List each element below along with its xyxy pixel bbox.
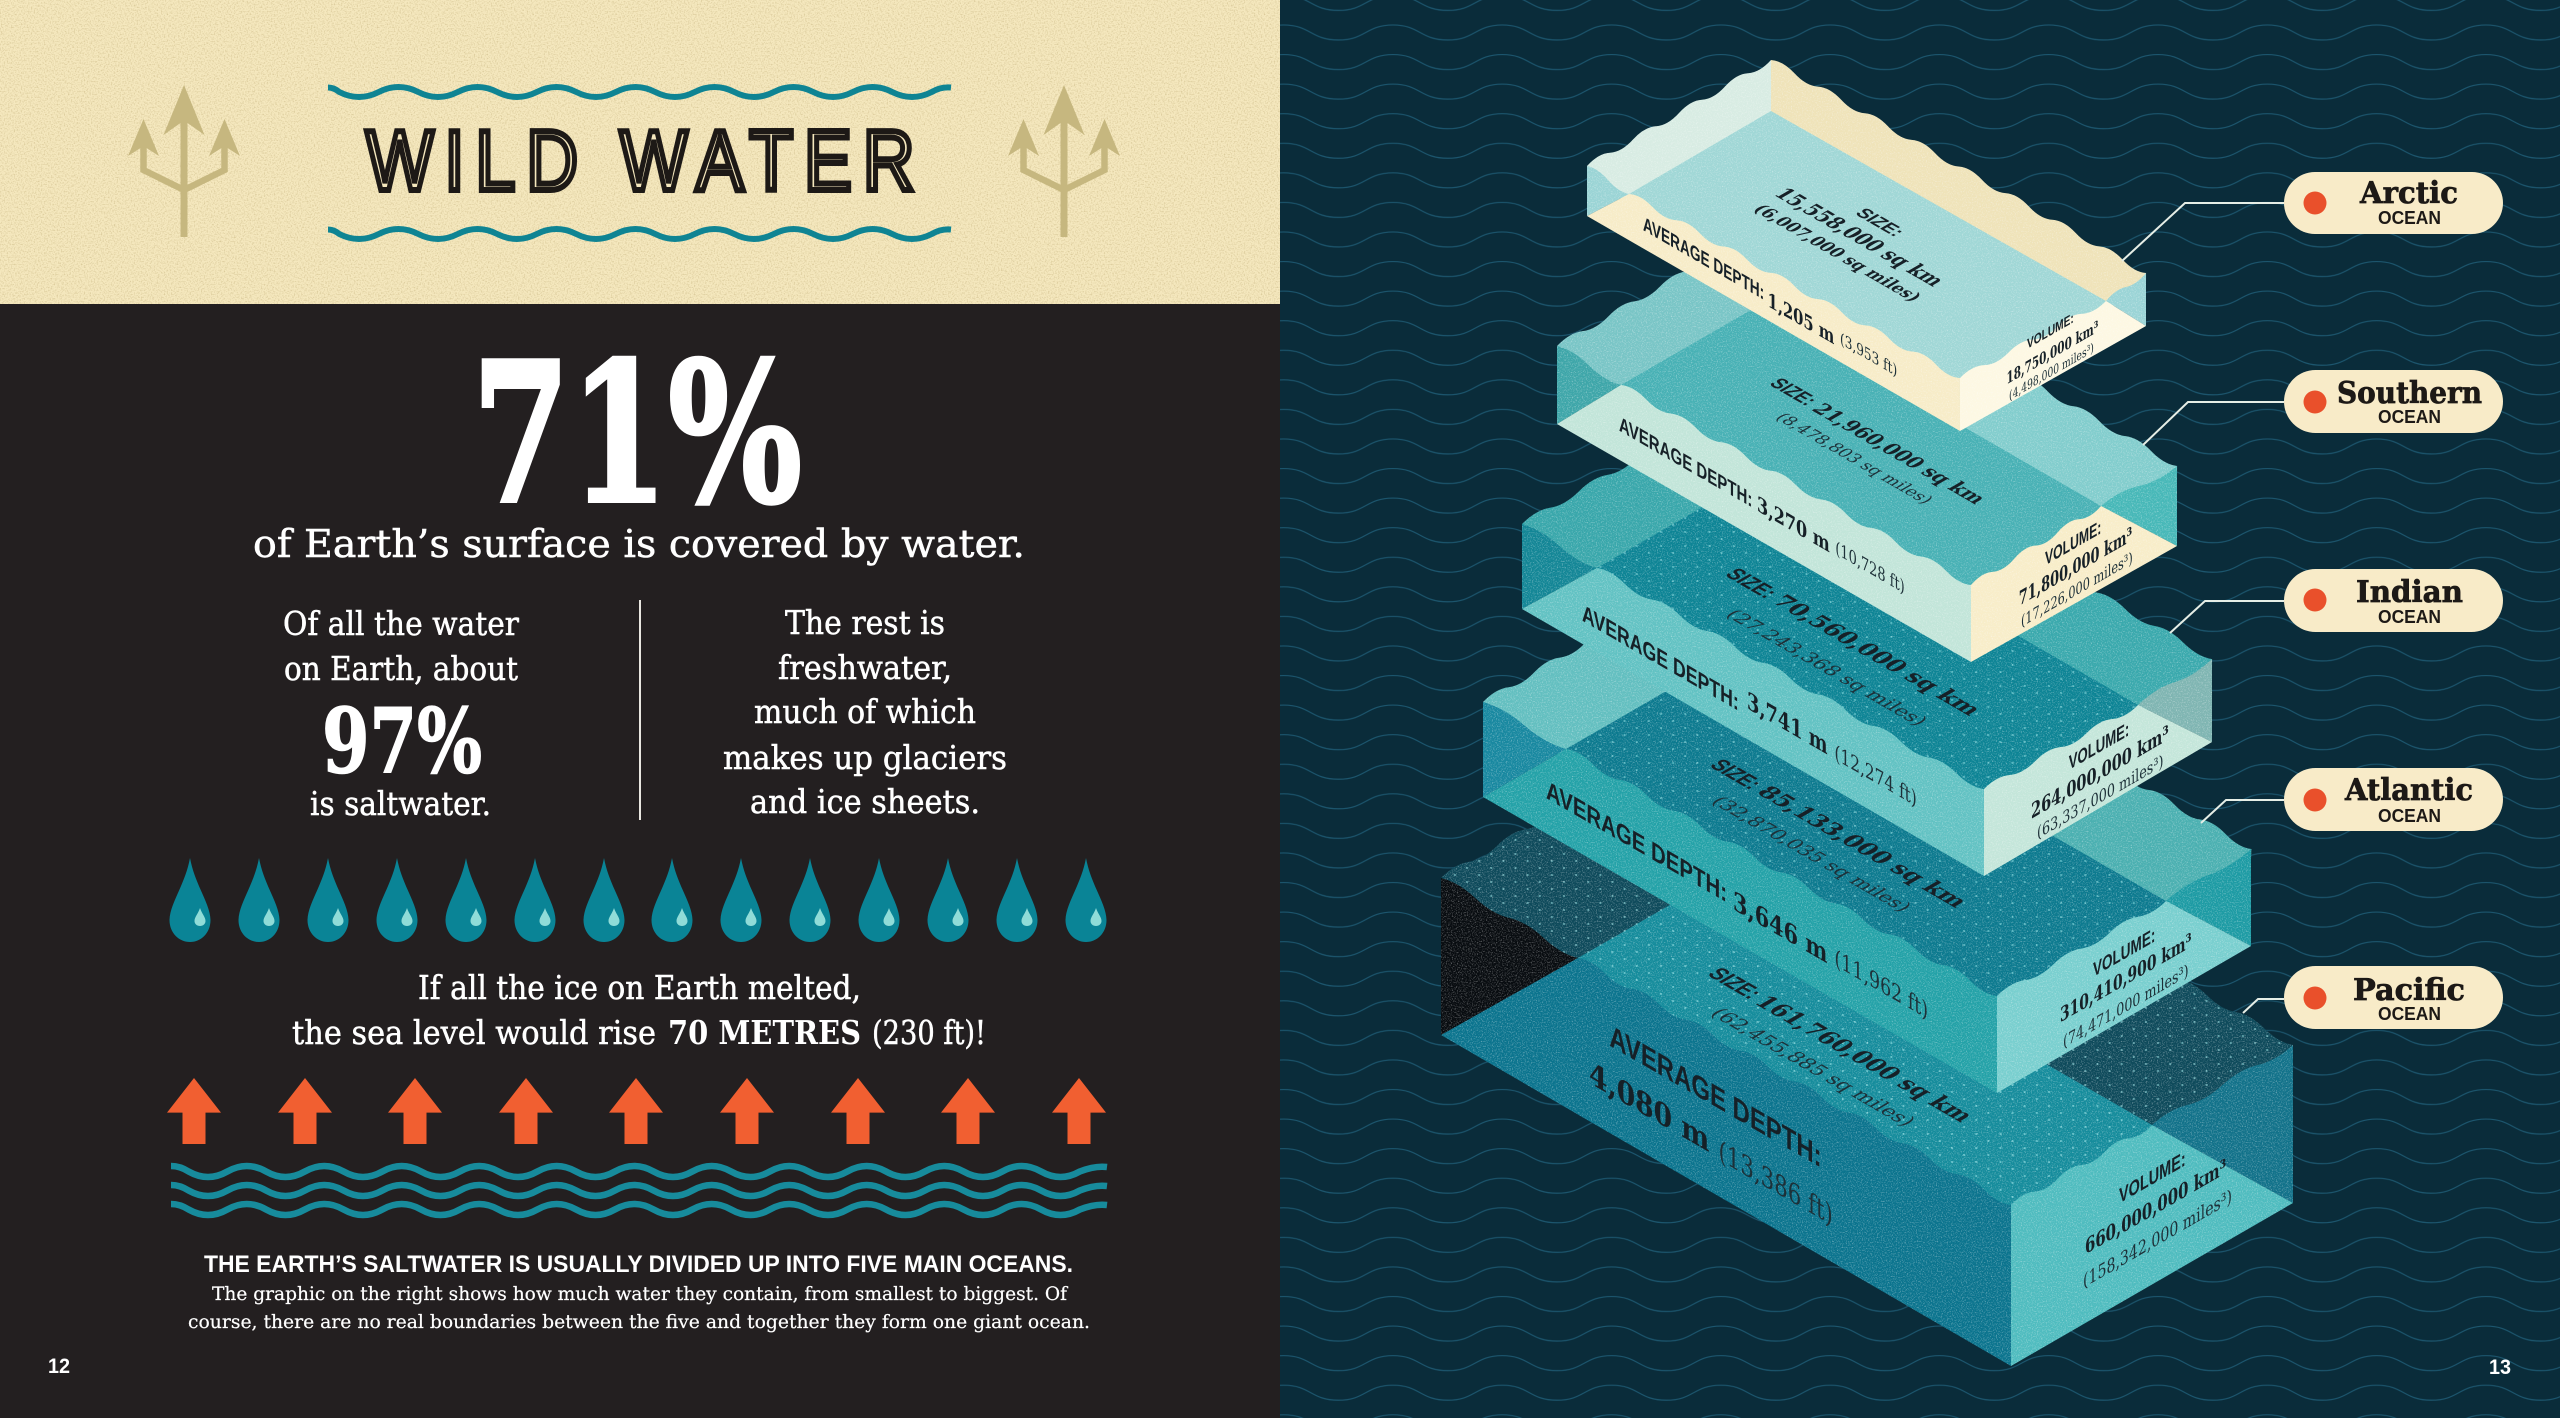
Arctic depth text: AVERAGE DEPTH: — [1643, 213, 1764, 305]
text: sea level rise: (230 ft)! — [872, 1013, 986, 1052]
Atlantic size text — [1704, 755, 1974, 915]
triple wave lines — [171, 1166, 1107, 1215]
leader line: Indian — [2170, 601, 2284, 633]
text block: freshwater: The rest is — [785, 603, 945, 642]
text block: saltwater: is saltwater. — [310, 784, 491, 823]
text block: freshwater: much of which — [754, 692, 976, 731]
Pacific size text: (62,455,885 sq miles) — [1705, 1004, 1922, 1130]
label: Indian Ocean — [2284, 569, 2503, 632]
text block: five oceans intro — [188, 1251, 1090, 1333]
bottom wave rule — [328, 229, 951, 239]
page number 12: 12 — [48, 1355, 70, 1378]
Atlantic depth text: 3,646 m — [1733, 886, 1827, 971]
page number 13: 13 — [2489, 1356, 2511, 1379]
Southern size text: SIZE: — [1764, 375, 1822, 409]
Southern size text: (8,478,803 sq miles) — [1770, 410, 1937, 507]
label: Pacific Ocean: OCEAN — [2378, 1004, 2441, 1024]
label: Arctic Ocean — [2284, 172, 2503, 234]
Indian volume text: 264,000,000 km³ — [2031, 719, 2169, 824]
Southern volume text: 71,800,000 km³ — [2019, 521, 2132, 611]
Atlantic depth text: (11,962 ft) — [1834, 945, 1928, 1025]
Indian volume text: VOLUME: — [2069, 718, 2129, 775]
text: sea level rise: 70 METRES — [668, 1013, 861, 1052]
text block: saltwater: Of all the water — [283, 604, 519, 643]
Atlantic volume text: VOLUME: — [2093, 924, 2155, 982]
Southern depth text: (10,728 ft) — [1835, 537, 1905, 599]
text block: freshwater — [723, 603, 1007, 821]
icon row: water drops — [170, 858, 1106, 942]
icon row: orange up arrows — [167, 1078, 1106, 1144]
text block: freshwater: freshwater, — [778, 648, 952, 687]
leader line: Arctic — [2122, 203, 2284, 261]
Indian volume text: (63,337,000 miles³) — [2037, 751, 2163, 844]
label: Southern Ocean: Southern — [2337, 376, 2482, 411]
Southern volume text: VOLUME: — [2045, 517, 2101, 571]
Pacific size text — [1700, 964, 1981, 1130]
block: Atlantic Ocean — [1483, 554, 2251, 1093]
Indian depth text — [1582, 599, 1917, 812]
text: sea level rise: the sea level would rise — [292, 1013, 656, 1052]
top wave rule — [328, 87, 951, 97]
Indian depth text: (12,274 ft) — [1834, 740, 1917, 812]
Indian size text: SIZE: — [1720, 564, 1784, 602]
Pacific volume text: VOLUME: — [2119, 1147, 2186, 1209]
Pacific depth text: AVERAGE DEPTH: — [1609, 1017, 1822, 1175]
Arctic depth text — [1643, 213, 1897, 381]
block: Arctic Ocean — [1587, 60, 2146, 431]
text: sea level rise — [292, 968, 986, 1052]
Pacific volume text: 660,000,000 km³ — [2085, 1153, 2226, 1260]
text: surface caption: of Earth’s surface is covered by water. — [253, 522, 1025, 566]
label: Arctic Ocean: Arctic — [2359, 176, 2458, 211]
label: Southern Ocean: OCEAN — [2378, 407, 2441, 427]
Atlantic size text: SIZE: — [1704, 755, 1768, 793]
text block: five oceans intro: THE EARTH’S SALTWATER IS USUALLY DIVIDED UP INTO FIVE MAIN OCEANS. — [204, 1251, 1073, 1278]
Pacific volume text: (158,342,000 miles³) — [2083, 1185, 2232, 1293]
Arctic volume text: (4,498,000 miles³) — [2009, 340, 2094, 405]
label: Atlantic Ocean: Atlantic — [2344, 773, 2473, 808]
divider — [639, 600, 641, 820]
Arctic depth text: (3,953 ft) — [1840, 328, 1897, 381]
panel: right page wave background — [1280, 0, 2560, 1418]
Southern depth text — [1619, 412, 1905, 599]
Southern depth text: 3,270 m — [1757, 490, 1830, 558]
Indian depth text: AVERAGE DEPTH: — [1582, 599, 1739, 717]
text: sea level rise: If all the ice on Earth melted, — [418, 968, 861, 1007]
Indian size text: (27,243,368 sq miles) — [1720, 606, 1933, 729]
Arctic volume text: 18,750,000 km³ — [2006, 316, 2098, 389]
text block: saltwater: on Earth, about — [284, 649, 518, 688]
label: Pacific Ocean — [2284, 966, 2503, 1029]
label: Indian Ocean: OCEAN — [2378, 607, 2441, 627]
Pacific size text: SIZE: — [1701, 964, 1768, 1003]
Arctic size text: (6,007,000 sq miles) — [1748, 202, 1926, 305]
Atlantic size text: (32,870,035 sq miles) — [1706, 793, 1917, 915]
block: Indian Ocean — [1522, 393, 2212, 876]
text block: freshwater: makes up glaciers — [723, 738, 1007, 777]
Atlantic volume text: (74,471,000 miles³) — [2063, 960, 2189, 1053]
Atlantic depth text: AVERAGE DEPTH: — [1546, 774, 1727, 909]
Southern size text: 21,960,000 sq km — [1806, 400, 1993, 507]
Pacific size text: 161,760,000 sq km — [1748, 991, 1981, 1126]
Pacific depth text: 4,080 m — [1589, 1055, 1710, 1160]
panel: left page background — [0, 0, 1280, 1418]
Arctic volume text — [2006, 309, 2098, 405]
icon: right trident — [1008, 85, 1120, 237]
block: Southern Ocean — [1557, 227, 2177, 662]
Atlantic depth text — [1546, 774, 1928, 1025]
Arctic volume text: VOLUME: — [2027, 309, 2074, 352]
Arctic depth text: 1,205 m — [1768, 287, 1834, 350]
Atlantic volume text: 310,410,900 km³ — [2060, 927, 2192, 1028]
leader line: Southern — [2143, 402, 2284, 445]
big statistic: 71%: 71% — [472, 320, 802, 547]
label: Indian Ocean: Indian — [2356, 575, 2463, 610]
label: Atlantic Ocean: OCEAN — [2378, 806, 2441, 826]
text block: freshwater: and ice sheets. — [750, 782, 980, 821]
Southern volume text: (17,226,000 miles³) — [2021, 548, 2133, 631]
Southern size text — [1763, 375, 1993, 507]
label: Atlantic Ocean — [2284, 768, 2503, 831]
label: Arctic Ocean: OCEAN — [2378, 208, 2441, 228]
text block: saltwater — [283, 604, 519, 823]
Southern depth text: AVERAGE DEPTH: — [1619, 412, 1752, 513]
Pacific depth text: (13,386 ft) — [1718, 1133, 1833, 1233]
Arctic size text: SIZE: — [1850, 206, 1909, 240]
text block: five oceans intro: course, there are no real boundaries between the five and together they form one giant ocean. — [188, 1311, 1090, 1333]
Arctic size text: 15,558,000 sq km — [1768, 184, 1950, 290]
leader line: Atlantic — [2201, 800, 2284, 823]
panel: title banner — [0, 0, 1280, 304]
label: Pacific Ocean: Pacific — [2353, 973, 2465, 1008]
text block: five oceans intro: The graphic on the right shows how much water they contain, from smallest to biggest. Of — [212, 1283, 1069, 1305]
Indian size text: 70,560,000 sq km — [1766, 591, 1988, 719]
Indian depth text: 3,741 m — [1747, 685, 1828, 761]
leader line: Pacific — [2243, 999, 2284, 1013]
Atlantic size text: 85,133,000 sq km — [1751, 782, 1974, 911]
label: Southern Ocean — [2284, 370, 2503, 433]
block: Pacific Ocean — [1441, 716, 2293, 1366]
title: WILD WATER — [366, 113, 915, 208]
icon: left trident — [128, 85, 240, 237]
statistic: 97%: 97% — [322, 688, 482, 793]
Indian size text — [1719, 564, 1988, 729]
